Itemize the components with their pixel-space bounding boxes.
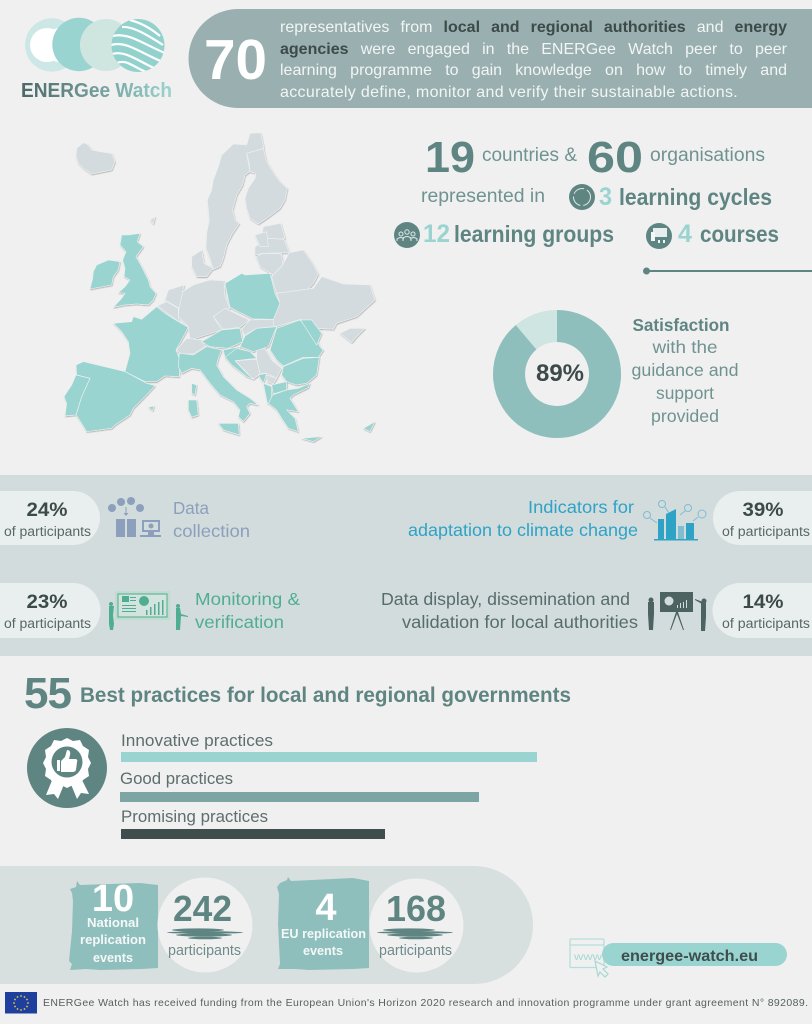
satisfaction caption: guidance and (632, 360, 738, 380)
stat: national participants: participants (168, 943, 241, 959)
label: monitoring and verification: Monitoring & (195, 589, 300, 609)
bar chart: practices: Good practices (120, 769, 233, 788)
stats: countries and organisations: countries & (482, 145, 577, 166)
stat: national participants (158, 878, 252, 972)
stat: eu participants (370, 878, 464, 972)
card: eu replication events: events (303, 943, 343, 958)
card: national replication events (69, 878, 158, 970)
icon: data collection (108, 497, 161, 537)
donut chart: satisfaction: 89% (536, 360, 584, 387)
header banner (188, 9, 812, 108)
panel: participants by topic (0, 475, 812, 656)
stat: data collection share: 24% (26, 500, 68, 521)
card: national replication events: replication (80, 932, 146, 947)
label: data collection: Data (173, 498, 209, 518)
learning groups: learning groups (454, 221, 614, 247)
header banner: 70 (204, 28, 267, 92)
stat: data display share (712, 583, 812, 638)
label: indicators for adaptation: Indicators for (528, 497, 634, 517)
stat: data display share: of participants (722, 616, 810, 631)
stats: countries and organisations: represented in (421, 186, 545, 207)
stat: data collection share (0, 491, 100, 545)
learning groups (394, 220, 614, 248)
stat: eu participants: participants (379, 943, 452, 959)
card: eu replication events (277, 877, 369, 970)
card: eu replication events: 4 (315, 887, 337, 929)
learning cycles (569, 183, 772, 211)
label: indicators for adaptation: adaptation to climate change (408, 520, 638, 540)
label: indicators for adaptation (408, 497, 638, 540)
icon: award badge (27, 728, 107, 808)
bar chart: practices: Innovative practices (121, 731, 273, 750)
stat: indicators share: of participants (722, 524, 810, 539)
bar chart: practices (120, 731, 537, 839)
stats: countries and organisations: 60 (587, 133, 643, 182)
satisfaction caption: provided (651, 406, 719, 426)
courses (646, 220, 779, 249)
funding statement: ENERGee Watch has received funding from the European Union's Horizon 2020 research and innovation programme under grant agreement N° 892089. (43, 997, 808, 1009)
icon: monitoring (109, 591, 188, 630)
satisfaction caption: with the (651, 337, 718, 357)
intro text: representatives from local and regional authorities and energy (280, 19, 787, 36)
heading: best practices: Best practices for local and regional governments (80, 684, 571, 707)
connector line (643, 268, 812, 274)
icon: presentation (648, 592, 706, 631)
label: data collection (173, 498, 250, 541)
stats: countries and organisations: 19 (425, 133, 475, 182)
logo: ENERGee Watch (21, 80, 172, 102)
intro text: accurately define, monitor and verify their sustainable actions. (280, 84, 738, 100)
website link: energee-watch.eu (621, 948, 758, 965)
learning cycles: 3 (599, 183, 612, 211)
panel: replication events (0, 866, 533, 984)
label: data collection: collection (173, 521, 250, 541)
heading: best practices: 55 (24, 669, 72, 718)
label: data display: Data display, dissemination and (381, 589, 630, 609)
card: eu replication events: EU replication (281, 926, 366, 941)
bar chart: practices: Promising practices (121, 807, 268, 826)
stat: data collection share: of participants (4, 524, 91, 539)
stats: countries and organisations: organisations (650, 145, 765, 166)
label: data display (381, 589, 638, 632)
courses: courses (700, 221, 779, 247)
stats: countries and organisations (421, 133, 765, 207)
intro text: learning programme to gain knowledge on how to timely and (280, 62, 787, 79)
stat: indicators share: 39% (742, 500, 784, 521)
learning cycles: learning cycles (619, 184, 772, 210)
courses: 4 (678, 220, 692, 248)
icon: eu flag (5, 992, 37, 1014)
label: data display: validation for local authorities (402, 612, 638, 632)
card: national replication events: events (93, 950, 133, 965)
learning groups: 12 (423, 220, 450, 248)
stat: eu participants: 168 (386, 888, 446, 929)
stat: monitoring share: of participants (4, 616, 91, 631)
europe map (64, 133, 375, 442)
label: monitoring and verification (195, 589, 300, 632)
stat: national participants: 242 (173, 888, 232, 929)
website link (570, 939, 787, 977)
satisfaction caption: Satisfaction (632, 315, 730, 335)
label: monitoring and verification: verification (195, 612, 284, 632)
intro text (280, 19, 787, 100)
stat: data display share: 14% (742, 592, 784, 613)
stat: monitoring share: 23% (26, 592, 68, 613)
card: national replication events: National (87, 915, 139, 930)
stat: indicators share (713, 491, 812, 545)
satisfaction caption: support (656, 383, 714, 403)
donut chart: satisfaction (509, 326, 605, 422)
icon: climate city (644, 500, 706, 540)
heading: best practices (24, 669, 571, 718)
logo (21, 18, 172, 102)
card: national replication events: 10 (92, 878, 134, 920)
stat: monitoring share (0, 583, 100, 638)
intro text: agencies were engaged in the ENERGee Watch peer to peer (280, 40, 787, 58)
website link: www (573, 952, 603, 963)
satisfaction caption (632, 315, 738, 426)
